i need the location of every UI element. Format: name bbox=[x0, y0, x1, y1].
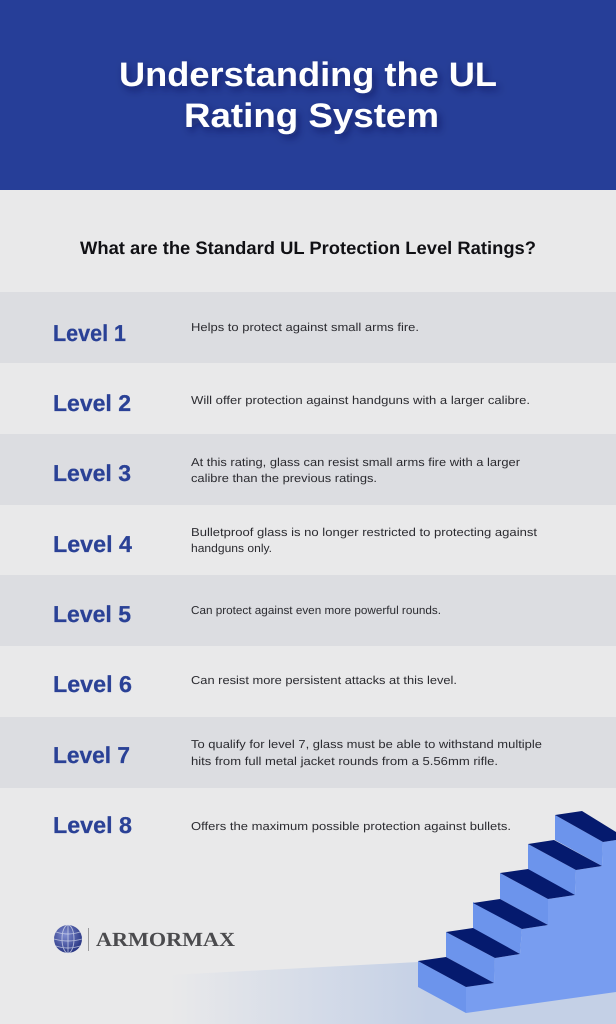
row: level 2: Will offer protection against handguns with a larger calibre. bbox=[191, 395, 530, 407]
logo divider bbox=[88, 928, 89, 951]
header banner bbox=[0, 0, 616, 190]
row: level 3 bbox=[0, 434, 616, 505]
row: level 7: To qualify for level 7, glass must be able to withstand multiple bbox=[191, 739, 542, 751]
row: level 6: Level 6 bbox=[53, 671, 132, 697]
staircase body bbox=[466, 840, 616, 1013]
logo wordmark: ARMORMAX bbox=[96, 929, 236, 951]
row: level 7: Level 7 bbox=[53, 742, 130, 768]
row: level 1: Helps to protect against small arms fire. bbox=[191, 322, 419, 334]
row: level 3: calibre than the previous ratings. bbox=[191, 473, 377, 485]
staircase risers bbox=[418, 815, 603, 1013]
row: level 7: hits from full metal jacket rounds from a 5.56mm rifle. bbox=[191, 756, 498, 768]
row: level 5: Can protect against even more powerful rounds. bbox=[191, 605, 441, 617]
row: level 6 bbox=[53, 671, 457, 697]
row: level 2: Level 2 bbox=[53, 390, 131, 416]
row: level 3: At this rating, glass can resist small arms fire with a larger bbox=[191, 457, 520, 469]
title: Understanding the UL bbox=[119, 56, 497, 94]
row: level 8: Level 8 bbox=[53, 812, 132, 838]
subheading: What are the Standard UL Protection Level Ratings? bbox=[80, 238, 536, 258]
icon: staircase bbox=[418, 811, 616, 1013]
row: level 4: Level 4 bbox=[53, 531, 132, 557]
row: level 3: Level 3 bbox=[53, 460, 131, 486]
icon: globe bbox=[54, 925, 82, 953]
row: level 7 bbox=[0, 717, 616, 788]
title bbox=[119, 56, 497, 135]
floor shadow bbox=[170, 962, 616, 1024]
row: level 4: Bulletproof glass is no longer restricted to protecting against bbox=[191, 527, 538, 539]
row: level 8: Offers the maximum possible protection against bullets. bbox=[191, 821, 511, 833]
row: level 4 bbox=[53, 527, 538, 557]
row: level 6: Can resist more persistent attacks at this level. bbox=[191, 675, 457, 687]
row: level 4: handguns only. bbox=[191, 543, 272, 555]
row: level 8 bbox=[53, 812, 511, 838]
row: level 5 bbox=[0, 575, 616, 646]
row: level 2 bbox=[53, 390, 530, 416]
row: level 1: Level 1 bbox=[53, 320, 126, 346]
title: Rating System bbox=[184, 97, 439, 135]
row: level 1 bbox=[0, 292, 616, 363]
logo: Armormax bbox=[54, 925, 236, 953]
row: level 5: Level 5 bbox=[53, 601, 131, 627]
staircase treads bbox=[418, 811, 616, 987]
